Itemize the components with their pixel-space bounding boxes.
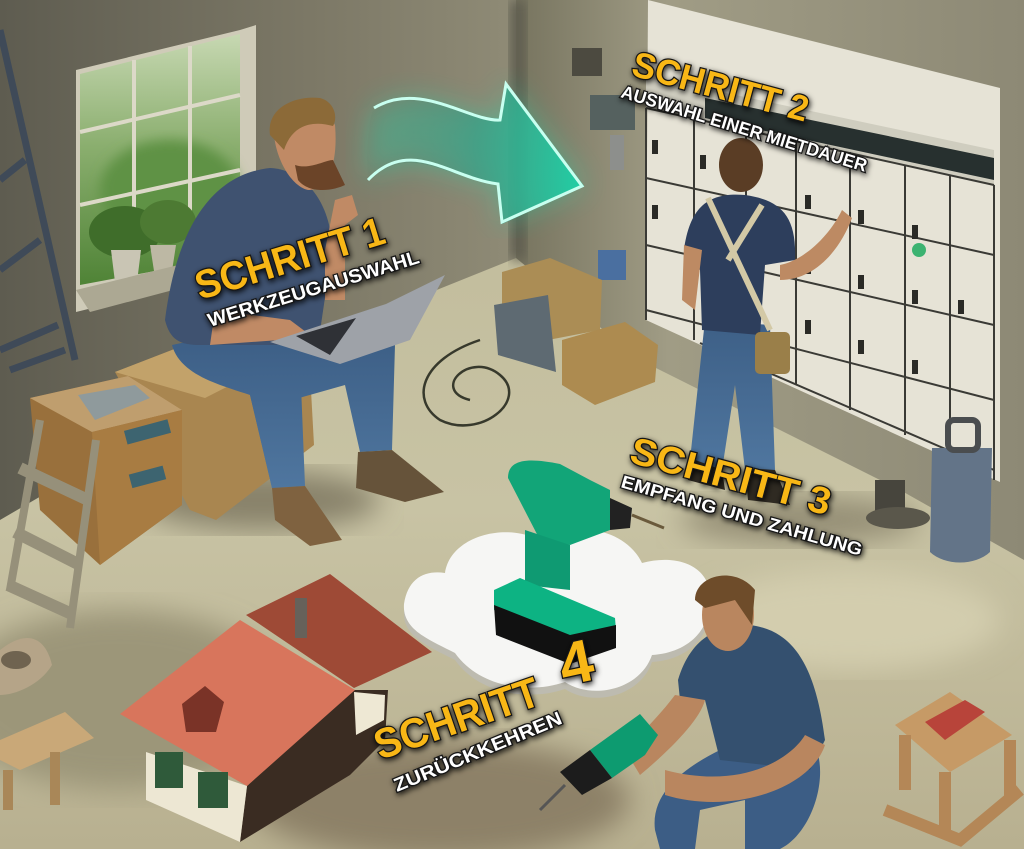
step 3 label: EMPFANG UND ZAHLUNG [619,472,865,560]
ladder on the left wall [0,30,75,370]
white cloud platform [404,529,710,698]
glowing green arrow [367,82,584,224]
step 4 label [368,626,600,797]
boxes and cables on the floor [424,258,658,425]
equipment on wall [572,48,635,280]
boxes stacked left [30,343,314,565]
step stool [8,420,96,628]
cordless drill on the cloud [494,461,664,664]
small house model [120,574,432,842]
step 2 label: AUSWAHL EINER MIETDAUER [619,82,869,176]
step 1 label: SCHRITT 1 [190,209,390,309]
step 1 label: WERKZEUGAUSWAHL [205,247,422,332]
person with drill [540,576,825,849]
wall calendar [646,0,1000,482]
step 4 label: SCHRITT [368,668,546,769]
step 4 label: ZURÜCKKEHREN [391,708,565,797]
step 4 label: 4 [553,626,600,699]
step 3 label [619,430,865,560]
wooden pallet stool on the right [885,692,1020,840]
bucket tool [866,420,992,562]
person at calendar [682,138,852,505]
step 2 label: SCHRITT 2 [628,43,813,130]
bowl and stool on the left [0,638,94,810]
step 2 label [619,43,869,176]
window with plants [76,25,256,312]
person with laptop [165,98,445,546]
step 3 label: SCHRITT 3 [626,430,836,524]
